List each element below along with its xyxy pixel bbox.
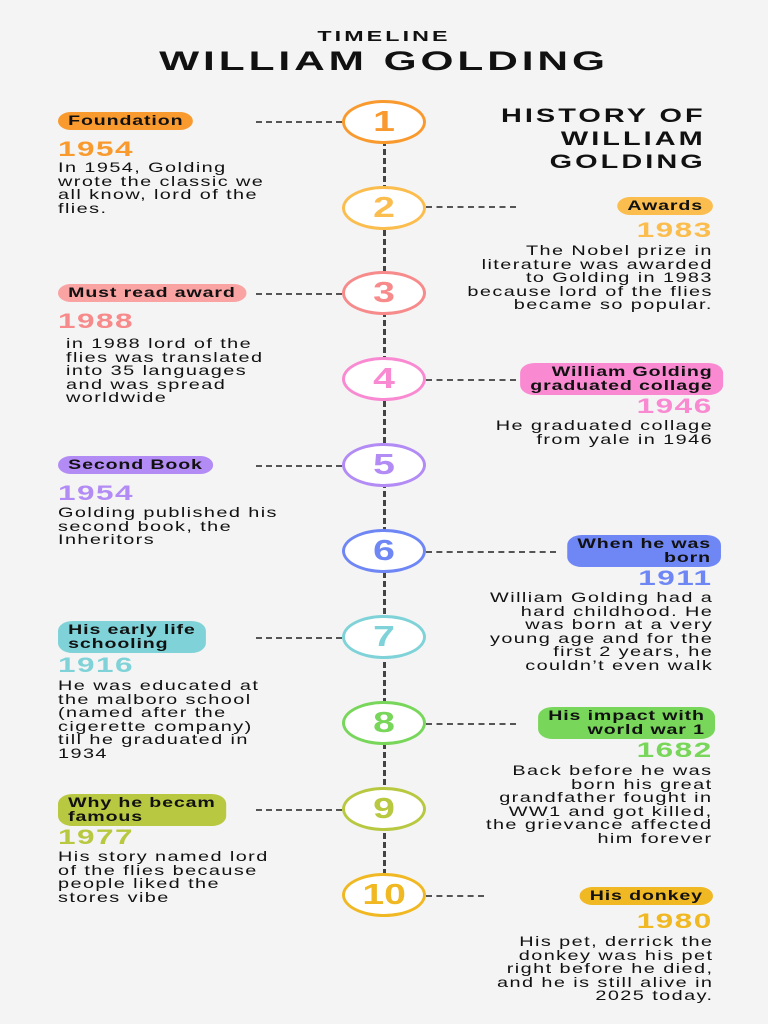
item 4: from yale in 1946 [536,430,713,446]
subtitle: WILLIAM [561,129,706,150]
item 7 [58,621,259,760]
item 10: His donkey [590,888,703,903]
circles: 2 [373,192,395,224]
item 3: in 1988 lord of the [66,335,252,351]
item 4: 1946 [637,395,713,418]
item 1: flies. [58,200,107,216]
item 2: became so popular. [514,296,713,312]
item 9: 1977 [58,826,134,849]
item 6: born [664,550,711,565]
item 1: all know, lord of the [58,186,258,202]
circles: 7 [373,621,395,653]
item 9: famous [68,809,143,824]
item 9: of the flies because [58,862,258,878]
item 3: worldwide [66,389,167,405]
timeline line [383,140,386,875]
item 8: world war 1 [588,722,705,737]
subtitle: GOLDING [550,152,706,173]
item 3 [58,284,263,405]
item 8: grandfather fought in [500,789,713,805]
item 8: 1682 [637,739,713,762]
item 5: Inheritors [58,531,155,547]
circles: 8 [373,707,395,739]
item 7: schooling [68,636,168,651]
title [159,28,609,76]
item 9: stores vibe [58,888,170,904]
item 1: wrote the classic we [58,172,264,188]
item 8: born his great [572,776,713,792]
item 7: the malboro school [58,690,252,706]
item 2: literature was awarded [482,256,713,272]
title: WILLIAM GOLDING [159,46,609,76]
item 2: The Nobel prize in [526,242,713,258]
item 5: second book, the [58,518,232,534]
item 5: 1954 [58,482,134,505]
item 4: William Golding [552,364,713,379]
item 8: WW1 and got killed, [509,802,713,818]
item 4 [496,363,724,447]
item 10: 2025 today. [595,987,713,1003]
item 9 [58,794,269,904]
item 10: and he is still alive in [497,974,713,990]
item 7: 1934 [58,744,108,760]
item 1: Foundation [68,113,183,128]
item 6: 1911 [639,567,713,590]
item 9: Why he becam [68,795,216,810]
item 2: Awards [627,198,703,213]
item 3: into 35 languages [66,362,247,378]
item 2: 1983 [637,219,713,242]
title: TIMELINE [317,28,451,45]
item 1 [58,112,264,216]
item 3: flies was translated [66,348,263,364]
item 6: first 2 years, he [553,643,713,659]
item 10: donkey was his pet [518,946,713,962]
item 6 [490,535,721,672]
item 7: (named after the [58,704,227,720]
item 7: 1916 [58,654,134,677]
item 5: Golding published his [58,504,278,520]
item 5 [58,456,278,547]
item 2 [468,197,713,312]
item 4: graduated collage [531,378,713,393]
item 4: He graduated collage [496,417,713,433]
item 6: couldn’t even walk [525,656,713,672]
item 6: was born at a very [525,616,713,632]
item 3: 1988 [58,310,134,333]
item 6: young age and for the [490,630,713,646]
item 8 [486,707,715,846]
circles: 5 [373,449,395,481]
item 3: and was spread [66,376,226,392]
item 5: Second Book [68,457,203,472]
item 8: Back before he was [513,762,713,778]
item 6: When he was [577,536,711,551]
circles: 9 [373,793,395,825]
item 1: 1954 [58,138,134,161]
item 2: because lord of the flies [468,282,713,298]
item 10: His pet, derrick the [519,933,713,949]
item 10: 1980 [637,910,713,933]
subtitle [501,106,706,173]
circles: 1 [373,106,395,138]
item 2: to Golding in 1983 [526,269,713,285]
item 7: He was educated at [58,677,259,693]
subtitle: HISTORY OF [501,106,706,127]
item 7: till he graduated in [58,731,249,747]
item 7: cigerette company) [58,718,253,734]
circles: 3 [373,277,395,309]
item 8: His impact with [548,708,705,723]
circles: 6 [373,535,395,567]
item 8: him forever [598,830,713,846]
circles: 10 [362,879,406,911]
item 9: people liked the [58,875,220,891]
item 8: the grievance affected [486,816,713,832]
circles: 4 [373,363,395,395]
item 9: His story named lord [58,848,269,864]
item 10 [497,887,713,1003]
item 1: In 1954, Golding [58,159,227,175]
item 6: William Golding had a [490,589,713,605]
item 3: Must read award [68,285,236,300]
item 10: right before he died, [506,960,713,976]
item 7: His early life [68,622,196,637]
item 6: hard childhood. He [521,602,713,618]
